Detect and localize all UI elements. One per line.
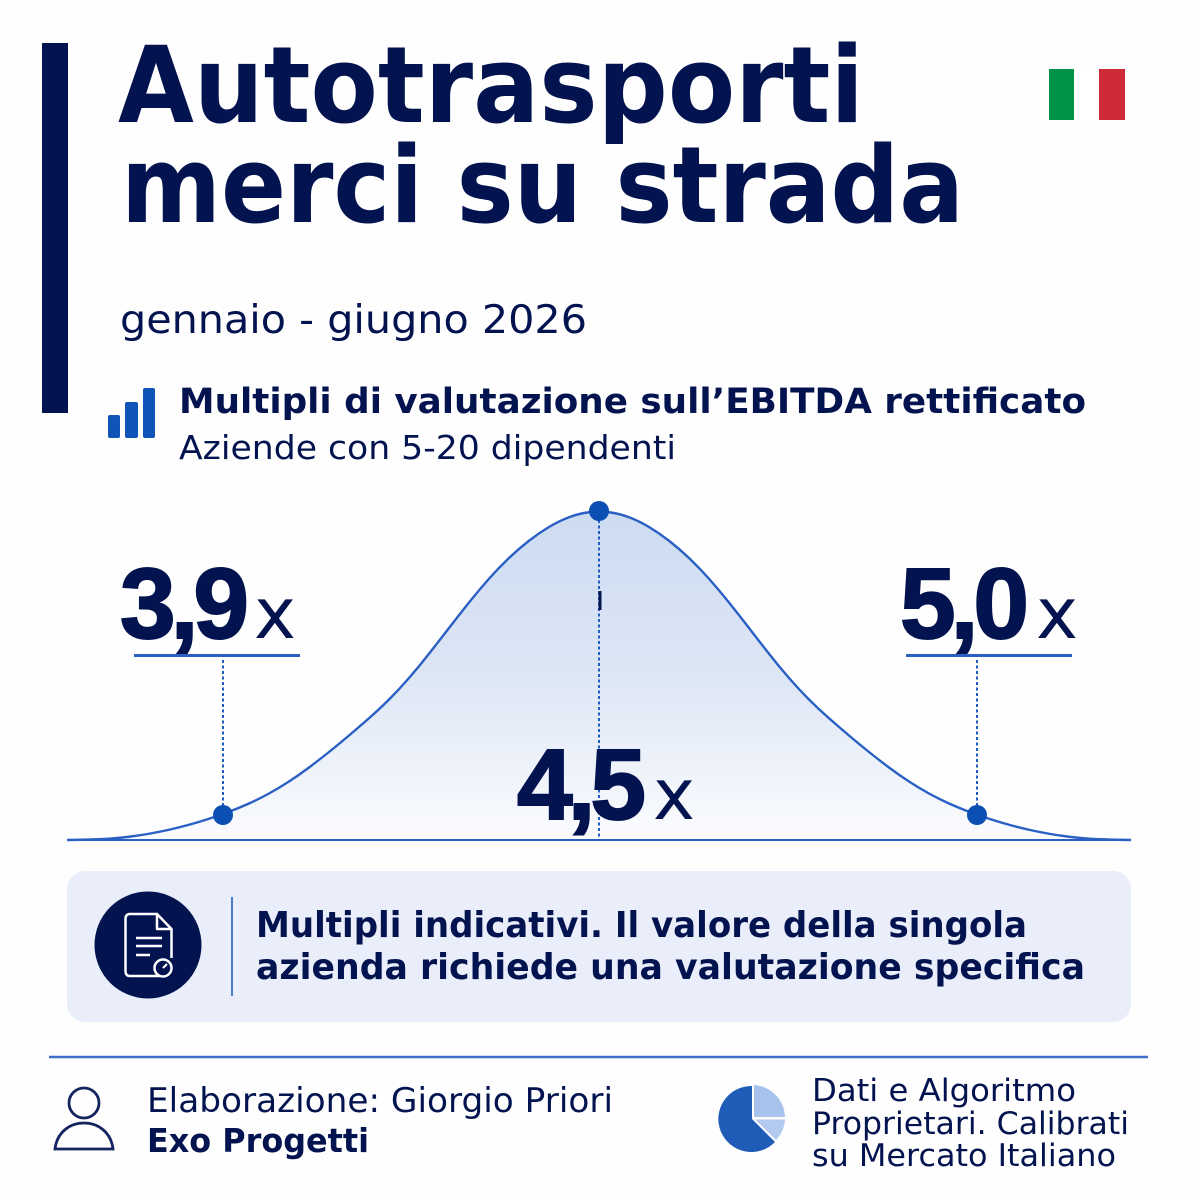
title: merci su strada <box>121 124 964 247</box>
footer: author: Exo Progetti <box>147 1121 369 1160</box>
value: 5,0x: 5,0 <box>900 548 1025 660</box>
value: 4,5x: 4,5 <box>517 729 643 841</box>
callout text: Multipli indicativi. Il valore della singola <box>256 905 1027 946</box>
accent bar <box>42 43 68 413</box>
footer: data note: Dati e Algoritmo <box>812 1073 1076 1109</box>
value: 3,9x <box>120 548 300 660</box>
point: low <box>213 805 233 825</box>
panel: callout <box>67 871 1131 1022</box>
guide: low <box>222 660 224 808</box>
value: 3,9x: 3,9 <box>120 548 245 660</box>
section heading: Aziende con 5-20 dipendenti <box>179 428 676 467</box>
callout text: azienda richiede una valutazione specifica <box>256 947 1085 988</box>
value: 5,0x <box>900 548 1078 660</box>
point: high <box>967 805 987 825</box>
footer: data note: Proprietari. Calibrati <box>812 1106 1129 1142</box>
icon: pie chart <box>718 1085 785 1152</box>
value: 4,5x: x <box>653 754 695 836</box>
footer: author: Elaborazione: Giorgio Priori <box>147 1081 613 1121</box>
icon: document <box>94 892 202 998</box>
baseline <box>67 839 1131 841</box>
guide: median <box>598 520 600 840</box>
curve area <box>67 512 1131 840</box>
value: 5,0x: x <box>1036 573 1078 655</box>
point: peak <box>589 501 609 521</box>
divider <box>231 897 233 996</box>
icon: italian flag <box>1049 69 1125 120</box>
curve line <box>67 512 1131 840</box>
guide: high <box>976 660 978 808</box>
median tick <box>598 591 602 610</box>
footer: data note: su Mercato Italiano <box>812 1138 1116 1174</box>
chart: bell curve <box>67 501 1131 841</box>
footer rule <box>49 1056 1148 1058</box>
icon: person <box>55 1088 113 1149</box>
value: 4,5x <box>517 729 695 841</box>
value: 3,9x: x <box>254 573 296 655</box>
footer: author <box>147 1081 613 1160</box>
section heading: Multipli di valutazione sull’EBITDA rettificato <box>179 382 1086 422</box>
callout text <box>256 905 1085 988</box>
title <box>118 24 964 247</box>
title: Autotrasporti <box>118 24 864 147</box>
icon: bar chart <box>108 388 155 438</box>
footer: data note <box>812 1073 1129 1174</box>
section heading <box>179 382 1086 467</box>
subtitle: period: gennaio - giugno 2026 <box>120 298 587 343</box>
